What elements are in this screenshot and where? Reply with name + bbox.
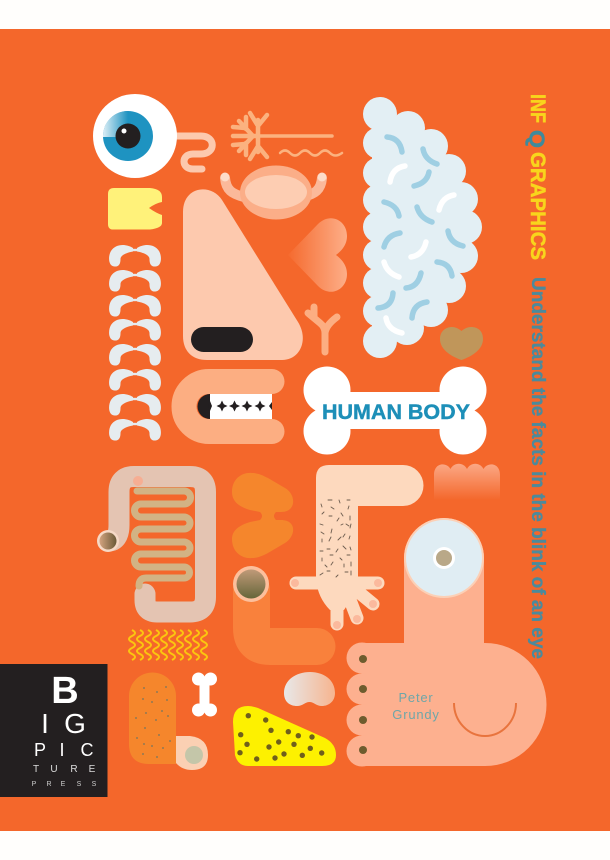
icon: thumbs-up fist with eye socket (346, 518, 546, 766)
publisher logo: I (41, 708, 49, 739)
icon: spine (109, 245, 161, 441)
icon: neuron (233, 113, 342, 159)
icon: large intestine and small intestine (97, 476, 206, 612)
publisher logo (0, 664, 108, 797)
publisher logo: P (32, 781, 37, 788)
title: Human Body: HUMAN BODY (322, 400, 470, 424)
title: series name: INF (526, 94, 549, 123)
publisher logo: G (64, 708, 86, 739)
icon: liver (440, 327, 483, 360)
icon: hairy arm and hand (291, 465, 423, 629)
icon: eye with optic nerve (93, 94, 212, 178)
title: series name: Q (525, 130, 548, 148)
publisher logo: T (33, 764, 39, 775)
icon: femur section (129, 673, 208, 770)
publisher logo: S (92, 781, 97, 788)
author name: Grundy (392, 707, 440, 722)
publisher logo: C (80, 740, 94, 760)
icon: tooth (108, 188, 162, 230)
icon: yellow fat wedge (233, 706, 336, 766)
publisher logo: U (50, 764, 58, 775)
title: series name: GRAPHICS (526, 152, 549, 260)
icon: nose (183, 189, 303, 360)
title: series name (525, 94, 549, 260)
icon: bronchi (308, 307, 337, 352)
bone with book title (304, 366, 486, 454)
icon: brain (363, 97, 482, 358)
publisher logo: E (61, 781, 66, 788)
publisher logo: E (89, 764, 96, 775)
publisher logo: S (77, 781, 82, 788)
icon: mouth with teeth (184, 382, 272, 432)
publisher logo: R (70, 764, 78, 775)
author name: Peter (398, 690, 434, 705)
publisher logo: I (59, 740, 65, 760)
publisher logo: R (46, 781, 52, 788)
subtitle: Understand the facts in the blink of an eye (527, 277, 548, 659)
icon: bean-shaped organ (284, 672, 335, 706)
icon: muscle block (434, 464, 500, 500)
icon: uterus (220, 166, 326, 220)
icon: oesophagus tube (233, 566, 317, 646)
publisher logo: P (34, 740, 46, 760)
icon: orange kidneys (232, 473, 293, 558)
icon: heart (288, 218, 347, 292)
author name (392, 690, 440, 722)
icon: yellow wavy fibres (129, 630, 207, 660)
icon: small bone (192, 672, 217, 716)
publisher logo: B (51, 670, 79, 712)
